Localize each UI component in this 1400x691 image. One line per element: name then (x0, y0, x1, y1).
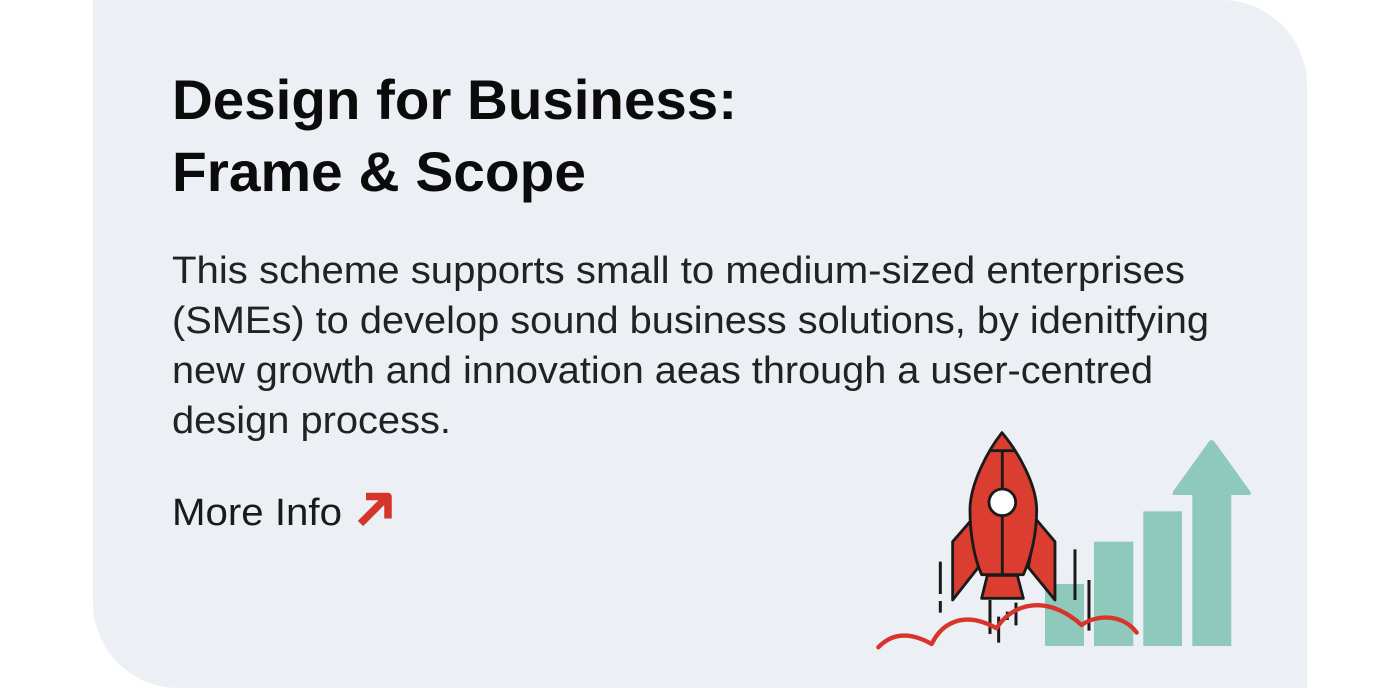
description text (172, 250, 1209, 442)
illustration: rocket and growth chart (878, 433, 1251, 647)
red cloud curve (878, 605, 1137, 647)
title: Design for Business: (172, 68, 737, 131)
icon: rocket (953, 433, 1055, 600)
title (172, 68, 737, 203)
more info link: More Info (172, 492, 342, 534)
motion lines (940, 549, 1089, 643)
description text: design process. (172, 400, 451, 442)
description text: This scheme supports small to medium-sized enterprises (172, 250, 1185, 292)
description text: new growth and innovation aeas through a user-centred (172, 350, 1153, 392)
description text: (SMEs) to develop sound business solutions, by idenitfying (172, 300, 1209, 342)
icon: red diagonal arrow (360, 496, 388, 524)
title: Frame & Scope (172, 140, 586, 203)
bar chart with growth arrow (1045, 440, 1251, 646)
